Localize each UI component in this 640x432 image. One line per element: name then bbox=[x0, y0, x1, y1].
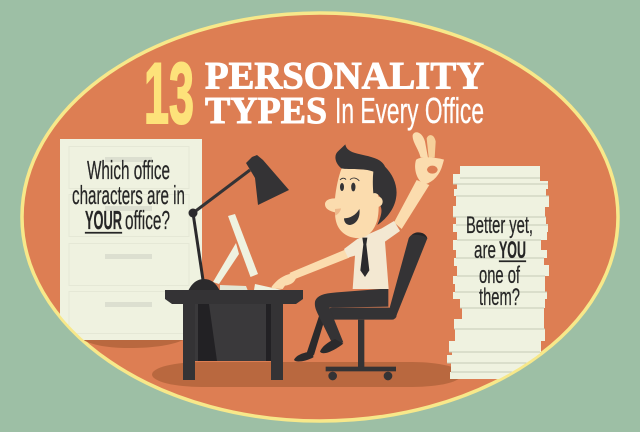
cabinet shadow bbox=[83, 340, 183, 348]
eyebrows bbox=[340, 178, 359, 181]
shirt bbox=[344, 221, 400, 289]
floor shadow bbox=[152, 362, 462, 387]
hand bbox=[413, 132, 444, 184]
question text: better yet: are bbox=[474, 237, 496, 264]
finger hole bbox=[427, 166, 438, 174]
question text: which office characters: YOUR bbox=[85, 205, 122, 235]
ear bbox=[378, 196, 383, 207]
filing cabinet bbox=[60, 139, 202, 340]
question text: better yet: one of bbox=[479, 262, 520, 289]
clipped scene bbox=[60, 132, 549, 387]
question text: better yet: them? bbox=[479, 284, 520, 311]
eyes bbox=[340, 183, 344, 191]
hair bbox=[335, 144, 397, 225]
paper stack bbox=[447, 166, 549, 379]
raised arm bbox=[394, 180, 429, 229]
title: personality: PERSONALITY bbox=[205, 54, 484, 98]
desk bbox=[165, 290, 303, 380]
question text: which office characters: characters are in bbox=[72, 180, 185, 210]
title: in every office: In Every Office bbox=[335, 90, 484, 131]
question text: which office characters: office? bbox=[125, 205, 170, 235]
desk lamp bbox=[188, 155, 289, 291]
chair bbox=[326, 232, 427, 380]
tie bbox=[360, 238, 369, 277]
head bbox=[325, 144, 397, 238]
question text: better yet: YOU bbox=[499, 237, 526, 264]
title: types: TYPES bbox=[205, 90, 327, 132]
question text: which office characters: Which office bbox=[87, 155, 170, 185]
trousers and shoes bbox=[294, 288, 388, 361]
question text: better yet: Better yet, bbox=[466, 212, 533, 239]
reaching arm bbox=[272, 249, 349, 289]
question text: better yet bbox=[467, 216, 532, 306]
mouth bbox=[344, 209, 360, 225]
title: 13: 13 bbox=[144, 46, 194, 142]
office worker character bbox=[272, 132, 444, 380]
question text: which office characters bbox=[72, 155, 185, 235]
monitor bbox=[213, 214, 282, 291]
